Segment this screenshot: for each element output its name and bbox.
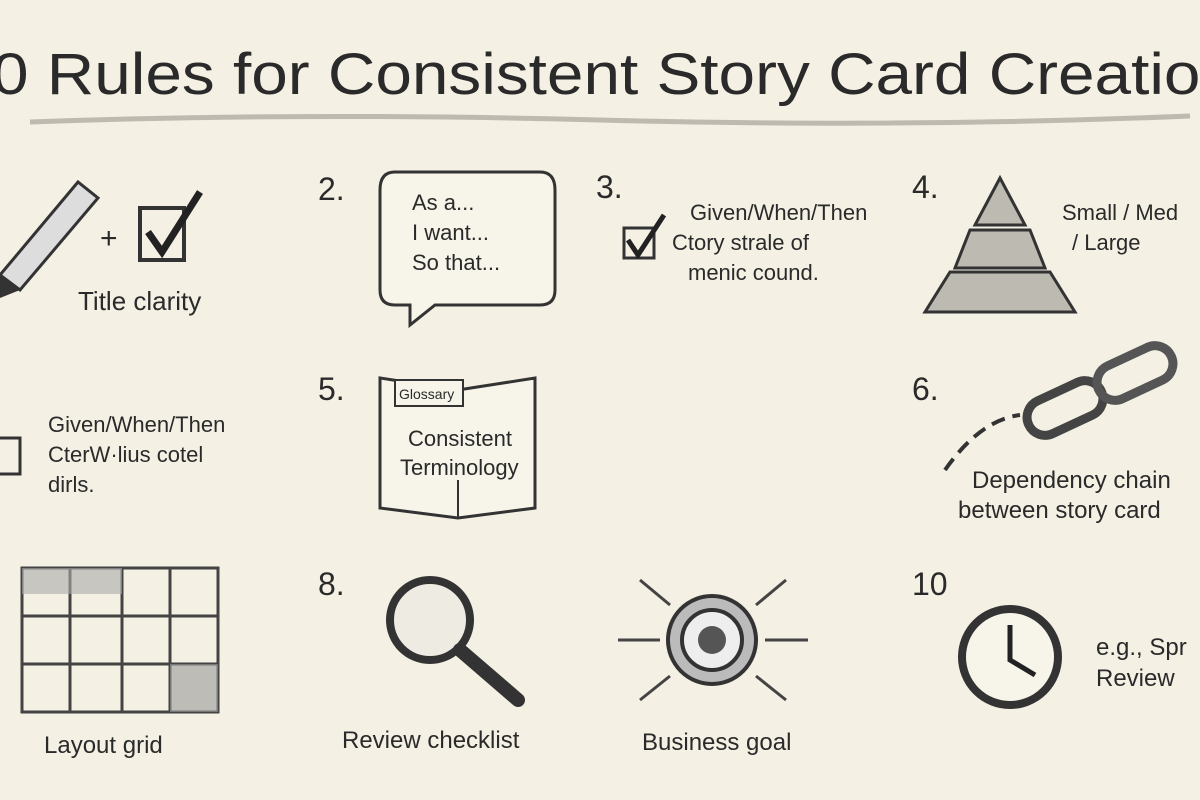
icon: pencil: [0, 182, 98, 300]
item 1: pencil and checkbox: +: [100, 222, 118, 255]
item 2: speech bubble: I want...: [412, 220, 489, 245]
item 10: clock: 10: [912, 566, 948, 602]
item 6: chain: [912, 340, 1179, 524]
item 1: pencil and checkbox: Title clarity: [78, 286, 201, 316]
item 6: chain: between story card: [958, 497, 1161, 524]
item 4: pyramid: 4.: [912, 169, 939, 205]
icon: checkbox: [140, 192, 200, 260]
item 1: pencil and checkbox: [0, 182, 201, 316]
item 7: layout grid: Layout grid: [44, 732, 163, 759]
item 2: speech bubble: So that...: [412, 250, 500, 275]
item 8: magnifier: [318, 566, 520, 754]
item 4: pyramid: / Large: [1072, 230, 1140, 255]
item 3: Ctory strale of: [672, 230, 810, 255]
item 10: clock: e.g., Spr: [1096, 634, 1187, 661]
item 10: clock: Review: [1096, 665, 1175, 692]
item 5: glossary book: Terminology: [400, 455, 519, 480]
item 5: glossary book: 5.: [318, 371, 345, 407]
item 6: chain: 6.: [912, 371, 939, 407]
item 4: pyramid: [912, 169, 1178, 312]
item 2: speech bubble: 2.: [318, 171, 345, 207]
item 5: glossary book: [318, 371, 535, 518]
item 8: magnifier: 8.: [318, 566, 345, 602]
item 4: pyramid: Small / Med: [1062, 200, 1178, 225]
item 3: 3.: [596, 169, 623, 205]
item 5: glossary book: Consistent: [408, 426, 512, 451]
item 5 left: checkbox text: dirls.: [48, 472, 94, 497]
item 2: speech bubble: [318, 171, 555, 325]
item 5: glossary book: Glossary: [399, 386, 454, 402]
item 5 left: checkbox text: CterW·lius cotel: [48, 442, 203, 467]
item 5 left: checkbox text: [0, 412, 225, 497]
item 3: [596, 169, 867, 285]
item 7: layout grid: [22, 568, 218, 759]
item 8: magnifier: Review checklist: [342, 727, 520, 754]
item 3: Given/When/Then: [690, 200, 867, 225]
item 3: menic cound.: [688, 260, 819, 285]
item 9: target: Business goal: [642, 729, 791, 756]
item 2: speech bubble: As a...: [412, 190, 474, 215]
title: 0 Rules for Consistent Story Card Creation: [0, 42, 1200, 107]
item 5 left: checkbox text: Given/When/Then: [48, 412, 225, 437]
item 9: target: [618, 580, 808, 756]
item 10: clock: [912, 566, 1187, 705]
item 6: chain: Dependency chain: [972, 467, 1171, 494]
